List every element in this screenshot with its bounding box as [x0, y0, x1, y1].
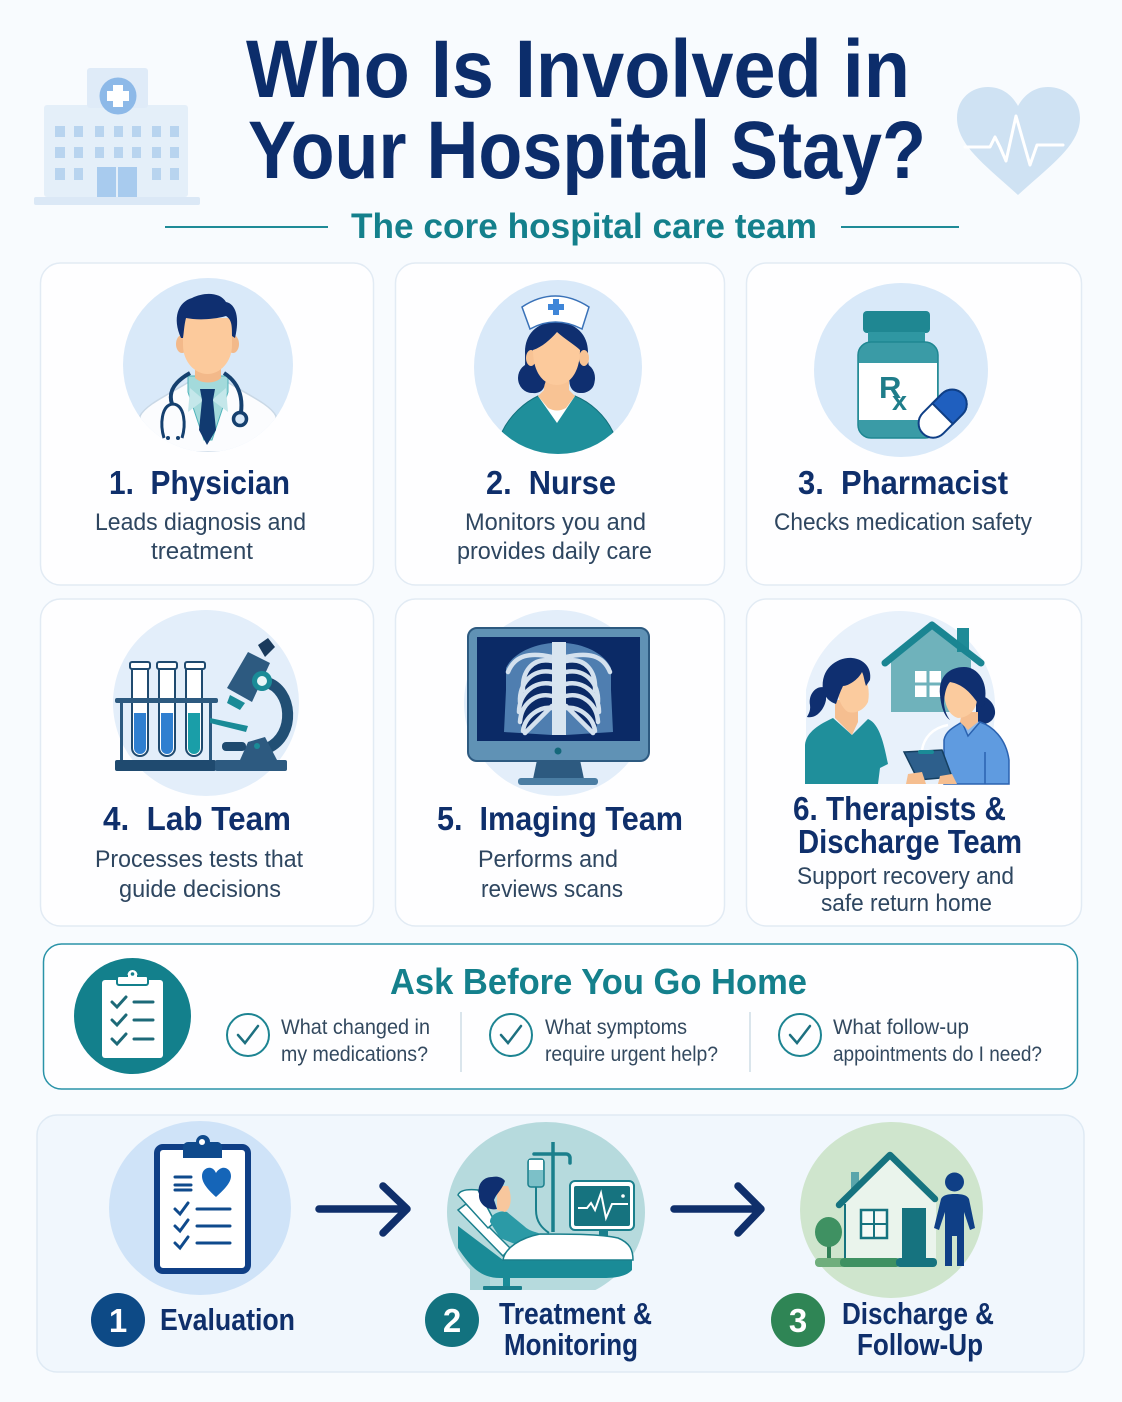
question: medications: my medications? [281, 1043, 428, 1066]
question: medications [227, 1014, 430, 1066]
person: nurse with ponytail [805, 658, 888, 784]
icon: hospital building [34, 68, 200, 205]
person: therapist with clipboard [904, 667, 1009, 784]
description: Processes tests that [95, 846, 303, 873]
panel: pharmacist [746, 263, 1082, 585]
description: Checks medication safety [774, 509, 1032, 536]
question: follow-up appointments [779, 1014, 1042, 1066]
heading: 3. Pharmacist [798, 464, 1008, 501]
heading: 2. Nurse [486, 464, 616, 501]
subtitle: The core hospital care team [351, 207, 817, 246]
step 1: evaluation: 1 [109, 1302, 127, 1339]
description: safe return home [821, 890, 992, 917]
heading: 5. Imaging Team [437, 800, 683, 837]
arrow [319, 1186, 407, 1233]
description: Monitors you and [465, 509, 646, 536]
panel: ask before you go home [44, 944, 1078, 1089]
icon: physician [123, 278, 293, 452]
icon: checklist clipboard [74, 958, 191, 1074]
icon: heart with pulse [957, 87, 1080, 195]
arrow [674, 1186, 761, 1233]
icon: medication bottle and capsule: R [879, 370, 901, 405]
heading [793, 790, 1022, 860]
icon: home with person [800, 1122, 983, 1298]
heading: 6. Therapists & [793, 790, 1006, 827]
description [797, 863, 1014, 917]
heading: 4. Lab Team [103, 800, 291, 837]
icon: medication bottle and capsule: x [892, 386, 907, 416]
description: provides daily care [457, 538, 652, 565]
question: symptoms: What symptoms [545, 1016, 687, 1039]
description: treatment [151, 538, 253, 565]
question: symptoms [490, 1014, 718, 1066]
panel: care journey [37, 1115, 1084, 1372]
panel: therapists and discharge team [746, 599, 1082, 926]
question: symptoms: require urgent help? [545, 1043, 718, 1066]
description [95, 509, 306, 565]
step 2: treatment and monitoring: 2 [443, 1302, 461, 1339]
description: reviews scans [481, 876, 623, 903]
step 3: discharge and follow-up: Discharge & [842, 1296, 994, 1331]
panel: nurse [396, 263, 724, 585]
question: follow-up appointments: appointments do I need? [833, 1043, 1042, 1066]
icon: x-ray monitor [464, 610, 650, 796]
panel: lab team [40, 599, 374, 926]
description [457, 509, 652, 565]
step 1: evaluation: Evaluation [160, 1302, 295, 1337]
heading: 1. Physician [109, 464, 290, 501]
step 3: discharge and follow-up: 3 [789, 1302, 807, 1339]
icon: medication bottle and capsule [814, 283, 988, 457]
step 2: treatment and monitoring: Monitoring [504, 1327, 638, 1362]
step 2: treatment and monitoring [425, 1293, 652, 1362]
icon: evaluation clipboard [109, 1121, 291, 1295]
description [95, 846, 303, 903]
description: Leads diagnosis and [95, 509, 306, 536]
description: Performs and [478, 846, 618, 873]
panel: imaging team [396, 599, 724, 926]
title: Your Hospital Stay? [248, 105, 926, 196]
panel: physician [40, 263, 374, 585]
icon: nurse [474, 280, 642, 460]
question: medications: What changed in [281, 1016, 430, 1039]
description: guide decisions [119, 876, 281, 903]
step 3: discharge and follow-up [771, 1293, 994, 1362]
description: Support recovery and [797, 863, 1014, 890]
title: Who Is Involved in [246, 24, 910, 115]
step 1: evaluation [91, 1293, 295, 1347]
step 3: discharge and follow-up: Follow-Up [857, 1327, 983, 1362]
question: follow-up appointments: What follow-up [833, 1016, 969, 1039]
heading: Ask Before You Go Home [390, 961, 807, 1002]
step 2: treatment and monitoring: Treatment & [499, 1296, 652, 1331]
icon: care team with house [805, 611, 1009, 784]
description [478, 846, 623, 903]
title [246, 24, 926, 196]
icon: patient in bed with monitor [447, 1122, 645, 1302]
heading: Discharge Team [798, 823, 1022, 860]
icon: test tubes and microscope [113, 610, 299, 796]
